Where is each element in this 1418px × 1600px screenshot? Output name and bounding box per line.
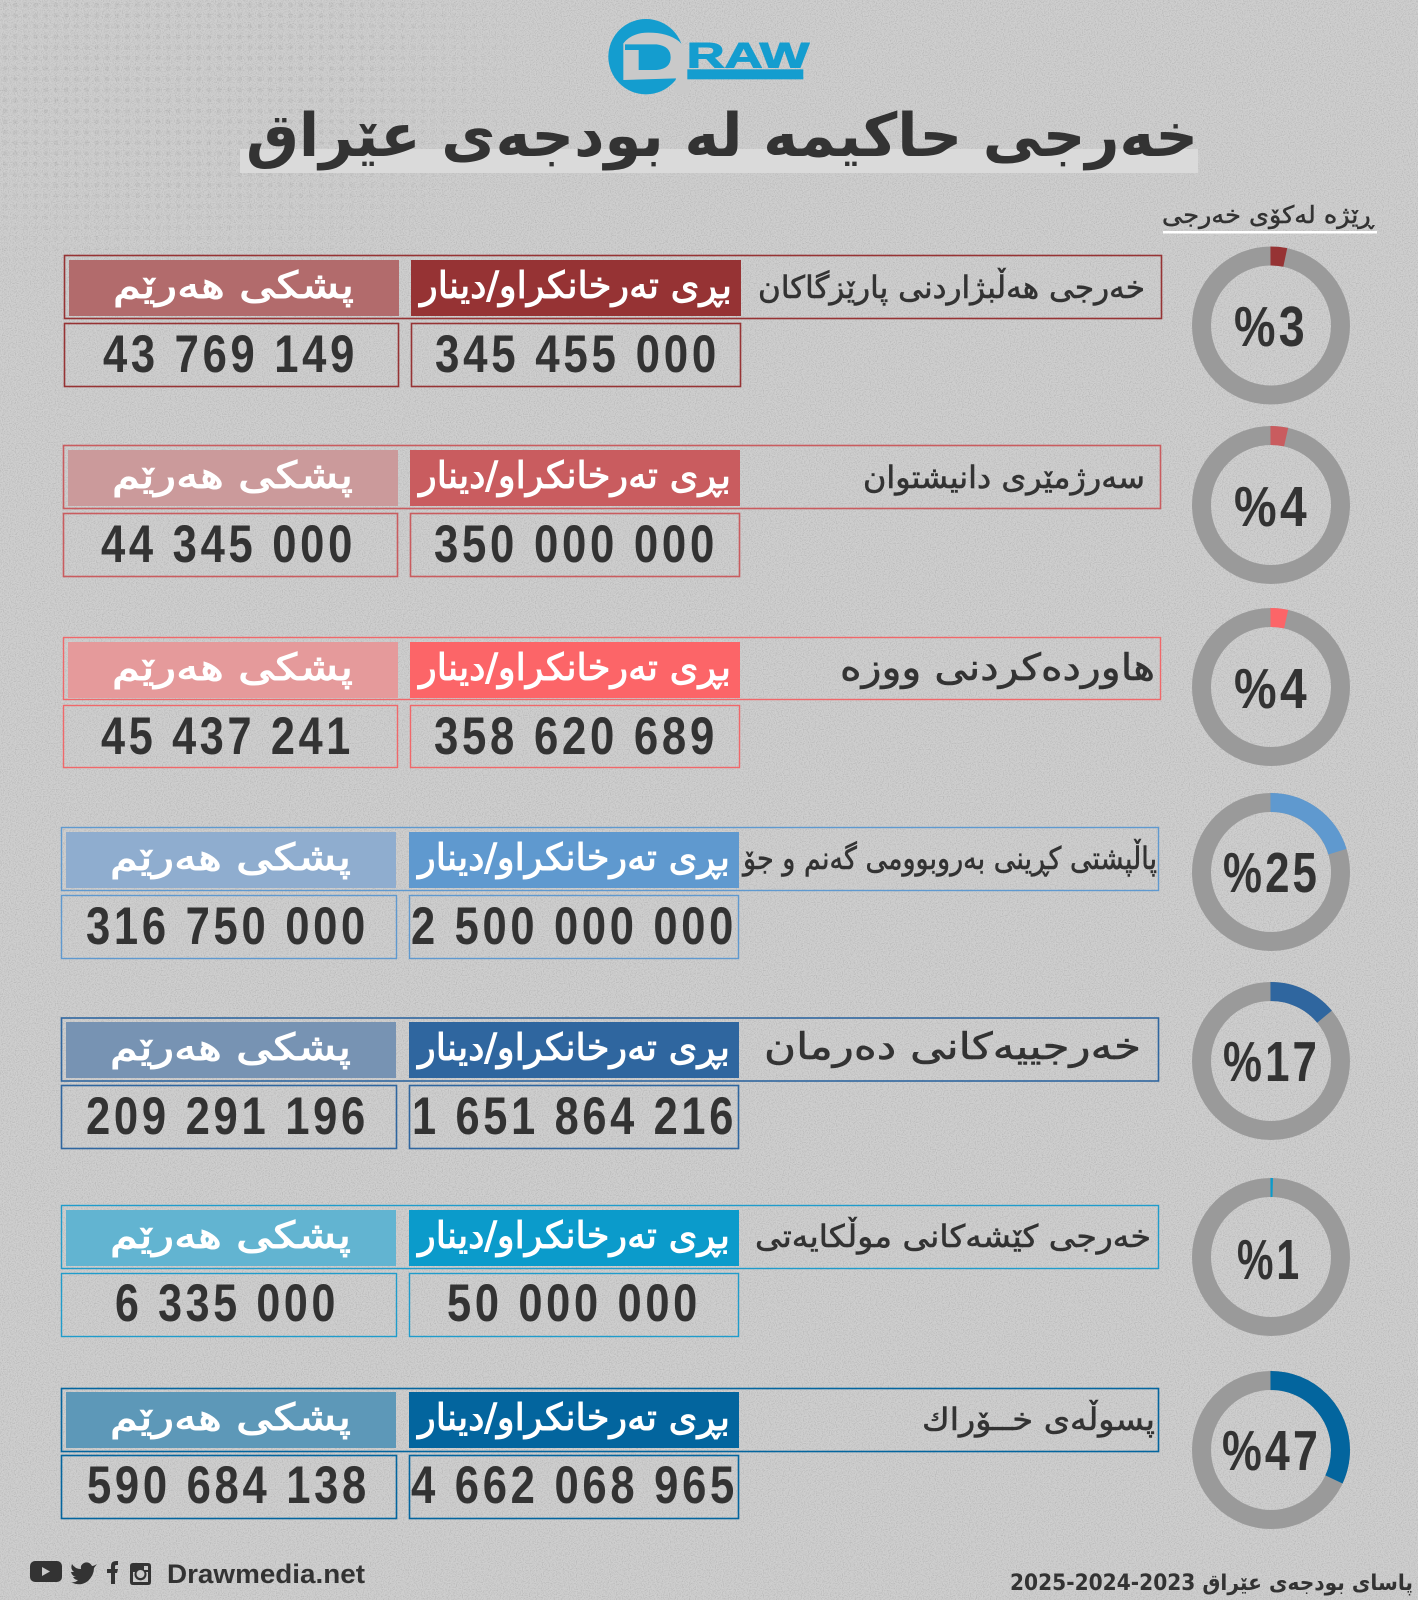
allocated amount header: بڕی تەرخانکراو/دینار xyxy=(416,836,730,879)
region share value: 6 335 000 xyxy=(115,1274,339,1333)
logo: Draw xyxy=(608,19,810,94)
donut: 25% xyxy=(1202,802,1340,942)
row 3: energy imports xyxy=(64,638,1160,768)
allocated amount header: بڕی تەرخانکراو/دینار xyxy=(418,264,732,307)
donut column heading: ڕێژە لەکۆی خەرجی xyxy=(1162,201,1375,229)
title: خەرجی حاکیمە لە بودجەی عێراق xyxy=(246,101,1198,171)
label frame xyxy=(64,446,1160,508)
donut: 47% xyxy=(1202,1380,1340,1520)
region share value: 209 291 196 xyxy=(86,1087,369,1146)
icon: facebook xyxy=(107,1561,118,1584)
region share header: پشکی هەرێم xyxy=(110,1026,351,1069)
title highlight band xyxy=(240,149,1198,173)
logo: Draw: RAW xyxy=(687,36,810,75)
region share header: پشکی هەرێم xyxy=(110,1396,351,1439)
region share header: پشکی هەرێم xyxy=(110,1214,351,1257)
region share header: پشکی هەرێم xyxy=(112,646,353,689)
region share value: 316 750 000 xyxy=(86,897,369,956)
region share header: پشکی هەرێم xyxy=(112,454,353,497)
row label: خەرجییەکانی دەرمان xyxy=(764,1025,1141,1068)
row label: پسوڵەی خــۆراك xyxy=(922,1400,1155,1438)
region share header xyxy=(66,1022,396,1078)
region share header xyxy=(66,1392,396,1448)
row 1: provincial elections xyxy=(64,256,1162,386)
allocated amount header: بڕی تەرخانکراو/دینار xyxy=(417,646,731,689)
donut: 4% energy: %4 xyxy=(1234,657,1310,721)
label frame xyxy=(64,256,1162,318)
region share header: پشکی هەرێم xyxy=(110,836,351,879)
region share header xyxy=(66,1210,396,1266)
row 2: census xyxy=(64,446,1160,576)
social icons xyxy=(30,1561,151,1585)
row label: هاوردەکردنی ووزە xyxy=(840,646,1155,689)
donut: 4% census xyxy=(1202,436,1340,574)
row 4: wheat and barley xyxy=(62,828,1158,958)
allocated value: 350 000 000 xyxy=(434,515,718,574)
donut: 47%: %47 xyxy=(1222,1419,1321,1483)
allocated value: 1 651 864 216 xyxy=(412,1087,737,1146)
icon: youtube xyxy=(30,1561,62,1582)
label frame xyxy=(62,828,1158,890)
label frame xyxy=(62,1388,1158,1452)
region share header xyxy=(68,642,398,698)
row label: سەرژمێری دانیشتوان xyxy=(863,460,1145,496)
donut: 1%: %1 xyxy=(1237,1228,1302,1292)
allocated value: 358 620 689 xyxy=(434,707,718,766)
row label: خەرجی کێشەکانی موڵکایەتی xyxy=(755,1217,1151,1255)
icon: instagram xyxy=(130,1563,151,1585)
region share header xyxy=(68,450,398,506)
allocated value: 50 000 000 xyxy=(447,1274,701,1333)
allocated value: 2 500 000 000 xyxy=(411,897,737,956)
website: Drawmedia.net xyxy=(167,1559,365,1589)
region share header xyxy=(69,260,399,316)
donut: 25%: %25 xyxy=(1223,841,1320,905)
allocated value: 345 455 000 xyxy=(435,325,720,384)
row label: خەرجی هەڵبژاردنی پارێزگاکان xyxy=(758,268,1145,306)
label frame xyxy=(64,638,1160,700)
region share header xyxy=(66,832,396,888)
donut: 4% energy xyxy=(1202,618,1340,756)
donut: 3% xyxy=(1202,256,1340,395)
allocated value: 4 662 068 965 xyxy=(411,1456,738,1515)
row 5: medicine xyxy=(62,1018,1158,1148)
donut: 17% xyxy=(1202,992,1340,1130)
region share value: 43 769 149 xyxy=(103,325,358,384)
label frame xyxy=(62,1018,1158,1081)
region share value: 44 345 000 xyxy=(101,515,356,574)
row 6: property disputes xyxy=(62,1206,1158,1336)
icon: twitter xyxy=(71,1562,97,1584)
region share header: پشکی هەرێم xyxy=(113,264,354,307)
region share value: 590 684 138 xyxy=(87,1456,370,1515)
region share value: 45 437 241 xyxy=(101,707,354,766)
donut: 4% census: %4 xyxy=(1234,475,1310,539)
row 7: food vouchers xyxy=(62,1388,1158,1518)
donut: 3%: %3 xyxy=(1234,295,1308,359)
allocated amount header: بڕی تەرخانکراو/دینار xyxy=(416,1396,730,1439)
label frame xyxy=(62,1206,1158,1268)
row label: پاڵپشتی کڕینی بەروبوومی گەنم و جۆ xyxy=(741,839,1157,877)
allocated amount header: بڕی تەرخانکراو/دینار xyxy=(416,1214,730,1257)
allocated amount header: بڕی تەرخانکراو/دینار xyxy=(417,454,731,497)
donut: 17%: %17 xyxy=(1223,1030,1320,1094)
allocated amount header: بڕی تەرخانکراو/دینار xyxy=(416,1026,730,1069)
donut: 1% xyxy=(1202,1188,1340,1326)
